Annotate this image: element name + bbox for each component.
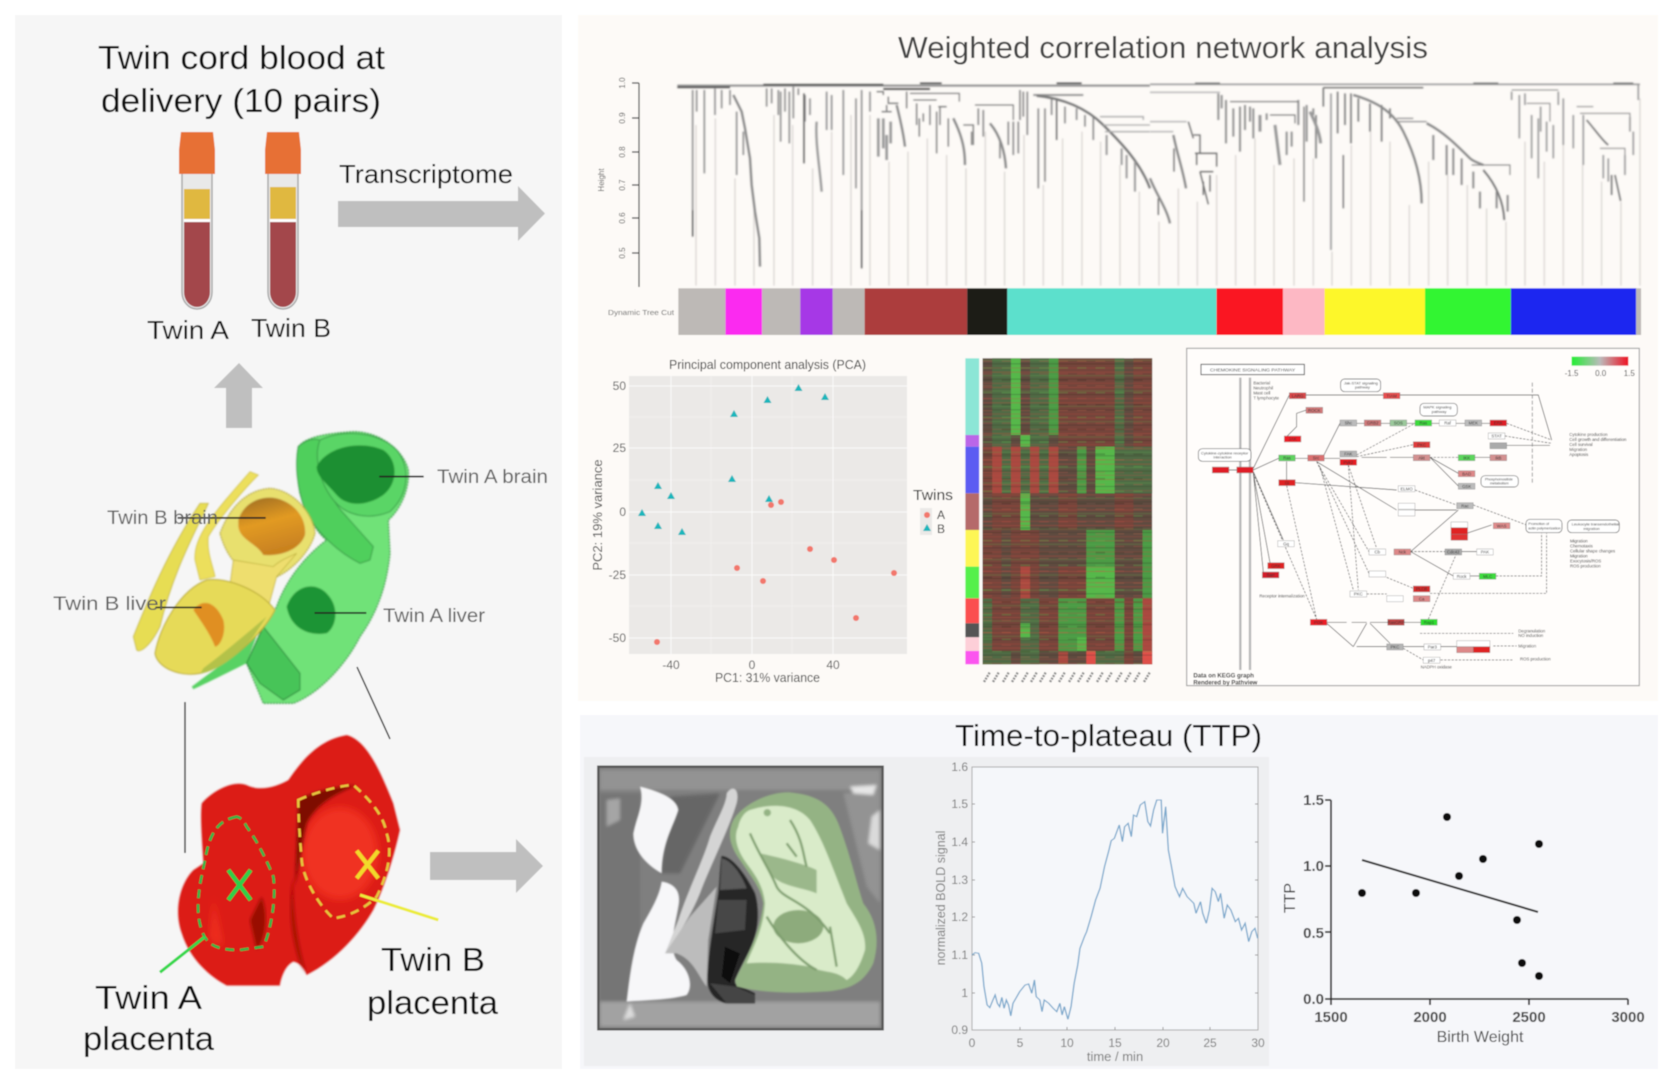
pathway effector text: Cell survival [1569, 442, 1593, 447]
figure: fetal MRI 3D rendering [53, 432, 548, 703]
data source note: Rendered by Pathview [1193, 681, 1258, 687]
pathway effector text: Mast cell [1253, 391, 1270, 396]
pathway effector text: Phosphoinositide [1485, 478, 1513, 482]
scatter axis labels: 0.0 [1303, 991, 1324, 1008]
pathway gene node labels: Rap1 [1424, 620, 1435, 625]
figure: placenta rendering [160, 735, 438, 986]
heatmap sample tick marks [984, 672, 1150, 682]
pathway gene node labels: Cdc42 [1447, 550, 1460, 555]
pathway effector text: Migration [1569, 447, 1588, 452]
BOLD axis labels: 20 [1156, 1036, 1170, 1050]
arrow: placenta to time-to-plateau [430, 839, 543, 893]
leader lines and organ labels: Twin B liver [53, 594, 167, 615]
heading: TTP: Time-to-plateau (TTP) [955, 718, 1262, 753]
pathway gene node labels: PKC [1354, 592, 1363, 597]
pathway gene node labels: PI3K [1314, 620, 1323, 625]
label: twin B placenta: placenta [367, 984, 499, 1021]
pathway gene node labels: GSK [1462, 484, 1471, 489]
pathway gene node labels: FAK [1344, 452, 1353, 457]
scatter axis labels: 1500 [1314, 1009, 1348, 1026]
scatter axis labels: 1.0 [1303, 858, 1324, 875]
pointer: twin A [160, 937, 205, 972]
pathway gene node labels: PLCB [1416, 587, 1427, 592]
BOLD axis labels: 1.2 [951, 910, 968, 924]
cell membrane [1240, 378, 1250, 670]
pathway effector text: Exocytosis/ROS [1570, 558, 1601, 563]
chart: normalized BOLD signal over time [934, 760, 1265, 1064]
pathway effector text: Cell growth and differentiation [1569, 437, 1627, 442]
leader lines and organ labels: Twin A brain [437, 467, 548, 488]
chart: principal component analysis [590, 357, 953, 685]
pathway effector text [1201, 380, 1627, 670]
data points [1358, 813, 1543, 980]
BOLD axis labels: 1.1 [951, 948, 968, 962]
pathway effector text: pathway [1432, 409, 1446, 414]
pathway gene node labels: WAS [1497, 523, 1507, 528]
BOLD axis labels: 0 [969, 1036, 976, 1050]
pathway gene node labels: JAK [1289, 437, 1297, 442]
leader lines and organ labels: Twin B brain [107, 508, 218, 529]
BOLD axis labels: 15 [1108, 1036, 1122, 1050]
module colour bar [678, 288, 1641, 335]
panel: time-to-plateau [580, 715, 1658, 1069]
pathway effector text: MAPK signaling [1423, 405, 1451, 410]
dendrogram axis labels: 0.6 [618, 212, 627, 224]
pathway effector text: Neutrophil [1253, 386, 1273, 391]
BOLD axis labels: 5 [1017, 1036, 1024, 1050]
pathway effector text: Migration [1570, 538, 1588, 543]
dendrogram axis labels: 0.8 [618, 146, 627, 158]
points: twin B [638, 384, 829, 535]
BOLD axis labels: 1 [961, 986, 968, 1000]
heading: twin cord blood [98, 39, 385, 119]
pathway effector text: Chemotaxis [1570, 543, 1593, 548]
pathway effector text: pathway [1355, 385, 1370, 390]
PCA axis labels: PC1: 31% variance [715, 670, 820, 685]
pathway effector text: Cytokine production [1569, 432, 1608, 437]
label: twin A placenta: Twin A [95, 979, 202, 1016]
pathway gene node labels: Gi [1285, 480, 1289, 485]
pathway effector text: Apoptosis [1569, 452, 1588, 457]
pathway legend: 0.0 [1595, 369, 1607, 378]
pathway effector text: Migration [1570, 553, 1588, 558]
pathway gene node labels: GRK [1271, 563, 1281, 568]
arrow: transcriptome to network analysis [338, 186, 545, 241]
PCA axis labels: -50 [609, 631, 626, 645]
pathway effector text: ROS production [1520, 657, 1551, 662]
pathway gene node labels: Ca [1419, 596, 1425, 601]
pathway gene node labels: PAK [1481, 550, 1489, 555]
heatmap cells [983, 358, 1152, 664]
pathway gene node labels: ROCK [1308, 408, 1321, 413]
pathway legend: -1.5 [1565, 369, 1579, 378]
chart: TTP versus birth weight scatter: TTP [1282, 883, 1299, 913]
PCA axis labels: -40 [662, 658, 680, 672]
pathway gene node labels: ELMO [1401, 486, 1413, 491]
label: twin A placenta [83, 979, 215, 1057]
pointer: twin B [360, 895, 438, 920]
pathway gene node labels [1267, 393, 1507, 663]
pathway gene node labels: Akt [1419, 455, 1426, 460]
pathway gene node labels: BAD [1462, 471, 1471, 476]
dendrogram axis labels: 0.9 [618, 112, 627, 124]
dendrogram axis labels [597, 77, 627, 259]
pathway effector text: ROS production [1570, 563, 1601, 568]
pathway legend: 1.5 [1624, 369, 1635, 378]
regression line [1362, 860, 1538, 912]
pathway effector text: Migration [1518, 643, 1537, 648]
pathway legend [1565, 357, 1635, 378]
pathway title box: CHEMOKINE SIGNALING PATHWAY [1210, 367, 1296, 373]
dendrogram left half [677, 83, 1150, 286]
pathway gene node labels: PKC [1391, 645, 1399, 650]
BOLD axis labels: 1.4 [951, 835, 968, 849]
label: twin A placenta: placenta [83, 1020, 215, 1057]
placenta mask [730, 792, 877, 993]
icon: blood tube twin A [179, 132, 215, 309]
pathway gene node labels: Raf [1444, 421, 1452, 426]
PCA axis labels: 0 [619, 505, 626, 519]
heading: WGCNA: Weighted correlation network analysis [898, 30, 1428, 65]
pathway effector text: Cytokine-cytokine receptor [1201, 450, 1249, 455]
pathway gene node labels: Pyk2 [1344, 460, 1354, 465]
chart: KEGG chemokine signaling pathway [1187, 348, 1639, 687]
pathway gene node labels: LARG [1292, 393, 1304, 398]
pathway gene node labels: STAT [1491, 434, 1502, 439]
pathway gene node labels: Rac [1461, 503, 1470, 508]
pathway gene node labels: p47 [1428, 658, 1436, 663]
BOLD axis labels: 25 [1203, 1036, 1217, 1050]
PCA axis labels: 50 [613, 379, 626, 393]
points: twin A [654, 499, 897, 645]
pathway gene node labels: IKK [1463, 455, 1470, 460]
pathway effector text: metabolism [1490, 482, 1509, 486]
leader lines and organ labels: Twin A liver [383, 606, 486, 627]
pathway effector text: Promotion of [1528, 522, 1550, 526]
green dashed outline twin A territory [198, 817, 274, 950]
pathway effector text: NO induction [1518, 633, 1544, 638]
pathway gene node labels: Nck [1399, 550, 1407, 555]
marker: yellow X [357, 851, 378, 878]
chart: module expression heatmap [965, 358, 1152, 682]
pathway gene node labels: Cb [1375, 550, 1381, 555]
pathway gene node labels: Par3 [1428, 645, 1437, 650]
dendrogram right half [1150, 83, 1640, 286]
dendrogram axis labels: 0.5 [618, 247, 627, 259]
dendrogram axis labels: 0.7 [618, 179, 627, 191]
pathway gene node labels: Rock [1457, 574, 1467, 579]
legend: twins [913, 487, 953, 536]
pathway gene node labels: Ras [1283, 456, 1291, 461]
BOLD curve [972, 800, 1258, 1019]
chart: TTP versus birth weight scatter: Birth Weight [1437, 1029, 1524, 1046]
BOLD axis labels: 1.3 [951, 873, 968, 887]
pathway effector text: Degranulation [1518, 628, 1546, 633]
PCA axis labels: 0 [749, 658, 756, 672]
label: twin B tube: Twin B [251, 313, 331, 343]
label: dynamic tree cut: Dynamic Tree Cut [608, 310, 674, 317]
pathway effector text: Jak-STAT signaling [1344, 380, 1378, 385]
pathway gene node labels: Shc [1345, 421, 1353, 426]
heading: twin cord blood: Twin cord blood at [98, 39, 385, 76]
chart: gene dendrogram [597, 77, 1640, 287]
BOLD axis labels: normalized BOLD signal [934, 831, 948, 965]
pathway effector text: migration [1583, 526, 1600, 531]
dendrogram y axis [632, 83, 639, 287]
yellow dashed outline twin B territory [298, 785, 389, 918]
BOLD axis labels [934, 760, 1265, 1064]
pathway gene node labels: TIAM [1386, 393, 1397, 398]
pathway gene node labels: SOS [1394, 421, 1403, 426]
panel: weighted correlation network analysis [578, 15, 1658, 701]
BOLD axis labels: 0.9 [951, 1023, 968, 1037]
BOLD axis labels: time / min [1087, 1049, 1143, 1064]
scatter axis labels: 2500 [1512, 1009, 1546, 1026]
heatmap module sidebar [965, 358, 979, 664]
pathway gene node labels: Gq [1283, 541, 1289, 546]
pathway gene node labels: Barr [1267, 573, 1275, 578]
connector lines between fetus and placenta [185, 667, 390, 853]
pathway effector text: T lymphocyte [1253, 396, 1280, 401]
pathway effector text: interaction [1213, 455, 1232, 460]
dendrogram axis labels: Height [597, 168, 606, 192]
data source note [1193, 674, 1258, 687]
chart title: Principal component analysis (PCA) [669, 357, 866, 372]
pathway gene node labels: IkB [1495, 455, 1502, 460]
pathway gene node labels: RasGRP [1387, 620, 1405, 625]
pathway gene node labels: MLC [1483, 574, 1492, 579]
pathway effector text: Bacterial [1253, 381, 1270, 386]
label: twin B placenta [367, 941, 499, 1021]
marker: green X [228, 870, 251, 900]
pathway effector text: NADPH oxidase [1421, 665, 1453, 670]
PCA axis labels: PC2: 19% variance [590, 459, 605, 571]
panel: twin samples and imaging [15, 15, 562, 1069]
label: transcriptome: Transcriptome [339, 159, 513, 189]
BOLD axis labels: 1.6 [951, 760, 968, 774]
scatter axis labels: 1.5 [1303, 792, 1324, 809]
chart: TTP versus birth weight scatter [1282, 792, 1645, 1046]
pathway gene node labels: GRB2 [1367, 421, 1379, 426]
PCA axis labels: 25 [613, 441, 626, 455]
pathway effector text: Cellular shape changes [1570, 548, 1615, 553]
pathway title box [1201, 364, 1304, 375]
pathway gene nodes [1212, 393, 1510, 663]
data source note: Data on KEGG graph [1193, 674, 1254, 680]
PCA axis labels: -25 [609, 568, 626, 582]
pathway gene node labels: Src [1313, 456, 1320, 461]
scatter axis labels: 0.5 [1303, 925, 1324, 942]
figure: placental MRI with green mask [598, 767, 883, 1029]
scatter axis labels [1303, 792, 1645, 1026]
icon: blood tube twin B [265, 132, 301, 309]
legend: twins: Twins [913, 487, 953, 504]
pathway effector text: actin polymerization [1528, 526, 1561, 530]
leader lines and organ labels [53, 467, 548, 627]
pathway effector text: Leukocyte transendothelial [1572, 522, 1619, 527]
pathway gene node labels: PKC [1417, 442, 1426, 447]
BOLD axis labels: 30 [1251, 1036, 1265, 1050]
dendrogram axis labels: 1.0 [618, 77, 627, 89]
PCA axis labels: 40 [826, 658, 840, 672]
PCA axis labels [590, 379, 840, 685]
pathway gene node labels: ERK [1494, 421, 1503, 426]
scatter axis labels: 2000 [1413, 1009, 1447, 1026]
legend: twins: A [937, 508, 945, 522]
pathway gene node labels: Ras [1419, 421, 1427, 426]
pathway gene node labels: MEK [1469, 421, 1478, 426]
label: twin A tube: Twin A [147, 315, 230, 345]
arrow: imaging up to cord blood [214, 363, 263, 428]
pathway rounded process boxes [1198, 379, 1619, 533]
pathway effector text: Receptor internalization [1259, 593, 1305, 598]
heading: twin cord blood: delivery (10 pairs) [101, 82, 381, 119]
scatter axis labels: 3000 [1611, 1009, 1645, 1026]
label: twin B placenta: Twin B [381, 941, 485, 978]
legend: twins: B [937, 522, 945, 536]
pathway edges [1229, 383, 1552, 660]
BOLD axis labels: 10 [1060, 1036, 1074, 1050]
BOLD axis labels: 1.5 [951, 797, 968, 811]
